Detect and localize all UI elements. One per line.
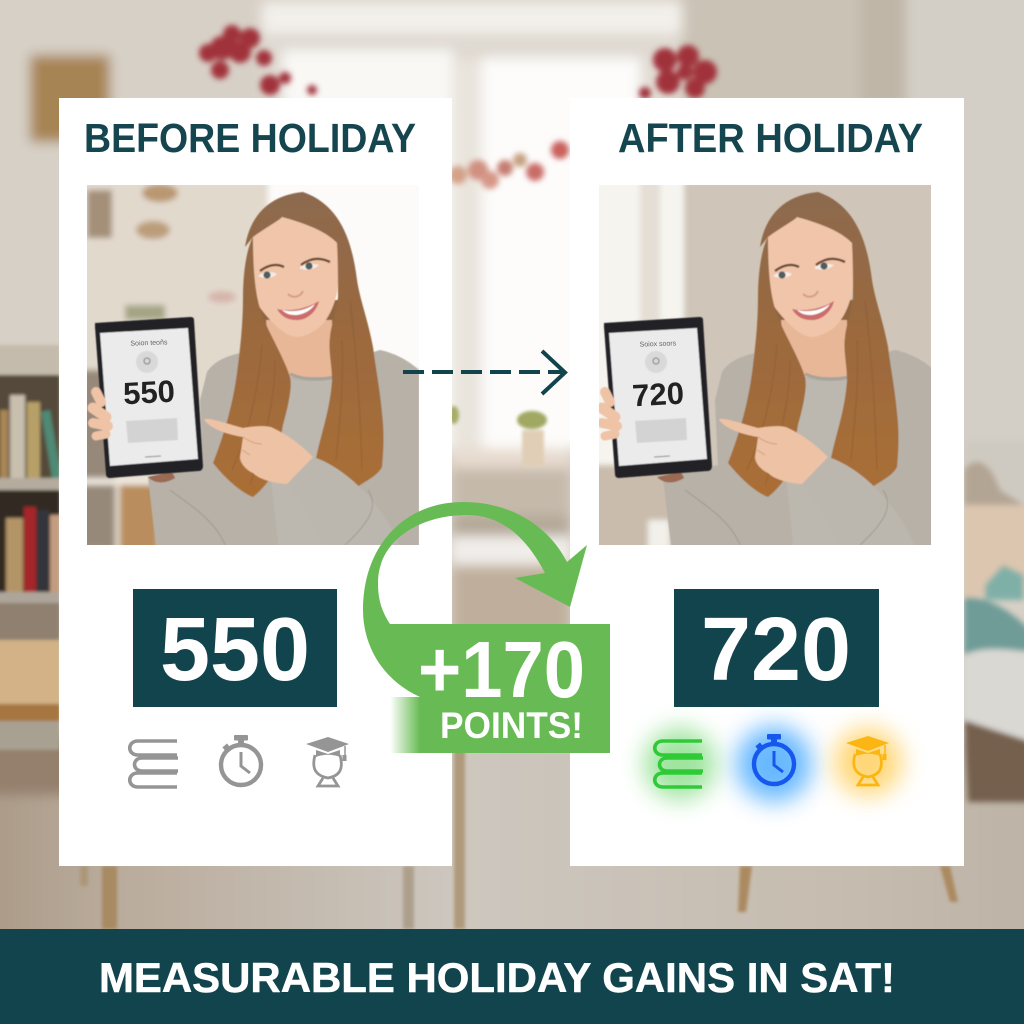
callout: +170 points: +170 [418, 625, 585, 714]
icon: books grey [130, 741, 178, 787]
icon: books green glow [644, 728, 716, 800]
heading: after holiday: AFTER HOLIDAY [618, 115, 923, 161]
score box 720 [674, 589, 879, 707]
icon: stopwatch blue glow [736, 726, 812, 802]
panel: after holiday [570, 98, 964, 866]
score box 720: 720 [701, 600, 851, 700]
tablet label: Soiox soors [640, 340, 677, 349]
callout: +170 points: POINTS! [440, 705, 583, 746]
bookshelf [0, 345, 60, 750]
tablet score 720: 720 [631, 376, 685, 413]
icon: graduate grey [306, 737, 349, 786]
score box 550 [133, 589, 337, 707]
tablet score 550: 550 [122, 374, 176, 411]
footer banner [0, 929, 1024, 1024]
tablet label: Soion teoñs [130, 339, 168, 348]
score box 550: 550 [160, 600, 310, 700]
curved green arrow [363, 502, 587, 697]
photo: student with 720 score tablet [599, 185, 931, 545]
photo: student with 550 score tablet [87, 185, 419, 545]
plant and window sill [449, 406, 547, 466]
table legs [80, 707, 958, 929]
icon: graduate yellow glow [834, 728, 902, 796]
panel: before holiday [59, 98, 452, 866]
callout: +170 points [390, 624, 610, 753]
footer banner: MEASURABLE HOLIDAY GAINS IN SAT! [99, 954, 895, 1001]
heading: before holiday: BEFORE HOLIDAY [84, 115, 416, 161]
icon: stopwatch grey [221, 735, 261, 785]
sofa and cushions [964, 440, 1024, 802]
dashed arrow between photos [403, 351, 565, 394]
wreath decorations [199, 25, 717, 189]
